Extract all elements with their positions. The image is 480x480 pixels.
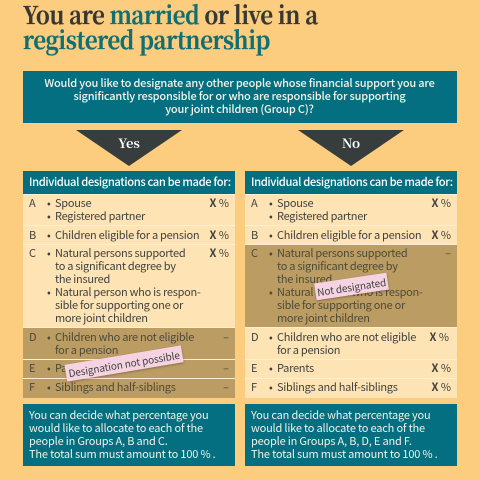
- row A: A: [251, 195, 257, 211]
- row C: C: [251, 245, 258, 261]
- footer note: You can decide what percentage you: [251, 407, 431, 423]
- row F: •: [269, 379, 272, 395]
- row D: [245, 328, 457, 359]
- row A: X %: [209, 195, 229, 211]
- row D: •: [47, 329, 50, 345]
- sticker: not designated: Not designated: [316, 274, 387, 299]
- title: [23, 0, 318, 57]
- row E: [23, 360, 235, 378]
- row F: F: [29, 379, 35, 395]
- row C: sible for supporting one or: [55, 297, 183, 313]
- panel: no: [245, 171, 457, 466]
- row A: •: [47, 195, 50, 211]
- row C: Natural person who is respon-: [277, 284, 423, 300]
- row B: •: [269, 227, 272, 243]
- row D: –: [223, 329, 229, 345]
- question box: significantly responsible for or who are responsible for supporting: [74, 88, 406, 104]
- row D: [23, 328, 235, 359]
- row E: X %: [431, 360, 451, 376]
- row B: •: [47, 227, 50, 243]
- row F: [245, 379, 457, 398]
- row B: X %: [209, 227, 229, 243]
- footer note: The total sum must amount to 100 % .: [29, 446, 216, 462]
- footer note: would like to allocate to each of the: [29, 420, 203, 436]
- row C: to a significant degree by: [277, 258, 398, 274]
- row F: Siblings and half-siblings: [55, 379, 176, 395]
- arrow: no: No: [342, 133, 360, 152]
- question box: your joint children (Group C)?: [165, 101, 314, 117]
- arrow: yes: Yes: [118, 133, 140, 152]
- row C: Natural persons supported: [55, 245, 185, 261]
- row B: [245, 226, 457, 244]
- row E: •: [47, 360, 50, 376]
- row C: the insured: [55, 271, 110, 287]
- row E: Parents: [55, 360, 92, 376]
- row A: Spouse: [277, 195, 313, 211]
- row B: B: [251, 227, 258, 243]
- row C: •: [269, 245, 272, 261]
- footer note: people in Groups A, B and C.: [29, 433, 168, 449]
- row E: E: [29, 360, 35, 376]
- row F: Siblings and half-siblings: [277, 379, 398, 395]
- row F: F: [251, 379, 257, 395]
- question box: [23, 71, 457, 123]
- question box: Would you like to designate any other people whose financial support you are: [44, 75, 435, 91]
- row A: X %: [431, 195, 451, 211]
- row E: [245, 360, 457, 378]
- row F: [23, 379, 235, 398]
- row C: more joint children: [55, 310, 148, 326]
- row D: D: [29, 329, 36, 345]
- row F: –: [223, 379, 229, 395]
- row A: [245, 195, 457, 225]
- footer note: [245, 404, 457, 466]
- row C: [245, 245, 457, 327]
- sticker: designation not possible: Designation not possible: [67, 347, 181, 380]
- row E: E: [251, 360, 257, 376]
- row B: B: [29, 227, 36, 243]
- panel heading: Individual designations can be made for:: [29, 174, 231, 190]
- row B: Children eligible for a pension: [55, 227, 199, 243]
- row E: –: [223, 360, 229, 376]
- row F: •: [47, 379, 50, 395]
- footer note: [23, 404, 235, 466]
- row A: [23, 195, 235, 225]
- row C: Natural person who is respon-: [55, 284, 201, 300]
- row A: •: [269, 195, 272, 211]
- row C: X %: [209, 245, 229, 261]
- row D: •: [269, 329, 272, 345]
- footer note: The total sum must amount to 100 % .: [251, 446, 438, 462]
- row A: •: [269, 208, 272, 224]
- panel: yes: [23, 171, 235, 466]
- row A: Registered partner: [277, 208, 367, 224]
- row B: [23, 226, 235, 244]
- arrow: yes: [76, 130, 182, 166]
- row C: sible for supporting one or: [277, 297, 405, 313]
- row C: –: [445, 245, 451, 261]
- row D: D: [251, 329, 258, 345]
- title: registered partnership: [23, 22, 270, 57]
- row E: •: [269, 360, 272, 376]
- row D: for a pension: [277, 342, 340, 358]
- row D: Children who are not eligible: [277, 329, 416, 345]
- row A: •: [47, 208, 50, 224]
- footer note: You can decide what percentage you: [29, 407, 209, 423]
- row A: Spouse: [55, 195, 91, 211]
- row C: •: [47, 245, 50, 261]
- row D: Children who are not eligible: [55, 329, 194, 345]
- row E: Parents: [277, 360, 314, 376]
- row C: to a significant degree by: [55, 258, 176, 274]
- panel heading: Individual designations can be made for:: [251, 174, 453, 190]
- row F: X %: [431, 379, 451, 395]
- row C: Natural persons supported: [277, 245, 407, 261]
- arrow: no: [298, 130, 404, 166]
- row C: •: [47, 284, 50, 300]
- panel heading: [245, 171, 457, 194]
- row A: A: [29, 195, 35, 211]
- row B: X %: [431, 227, 451, 243]
- footer note: people in Groups A, B, D, E and F.: [251, 433, 412, 449]
- row C: the insured: [277, 271, 332, 287]
- footer note: would like to allocate to each of the: [251, 420, 425, 436]
- row D: X %: [429, 329, 449, 345]
- row C: •: [269, 284, 272, 300]
- row C: more joint children: [277, 310, 370, 326]
- row A: Registered partner: [55, 208, 145, 224]
- row C: [23, 245, 235, 327]
- row C: C: [29, 245, 36, 261]
- row D: for a pension: [55, 342, 118, 358]
- panel heading: [23, 171, 235, 194]
- row B: Children eligible for a pension: [277, 227, 421, 243]
